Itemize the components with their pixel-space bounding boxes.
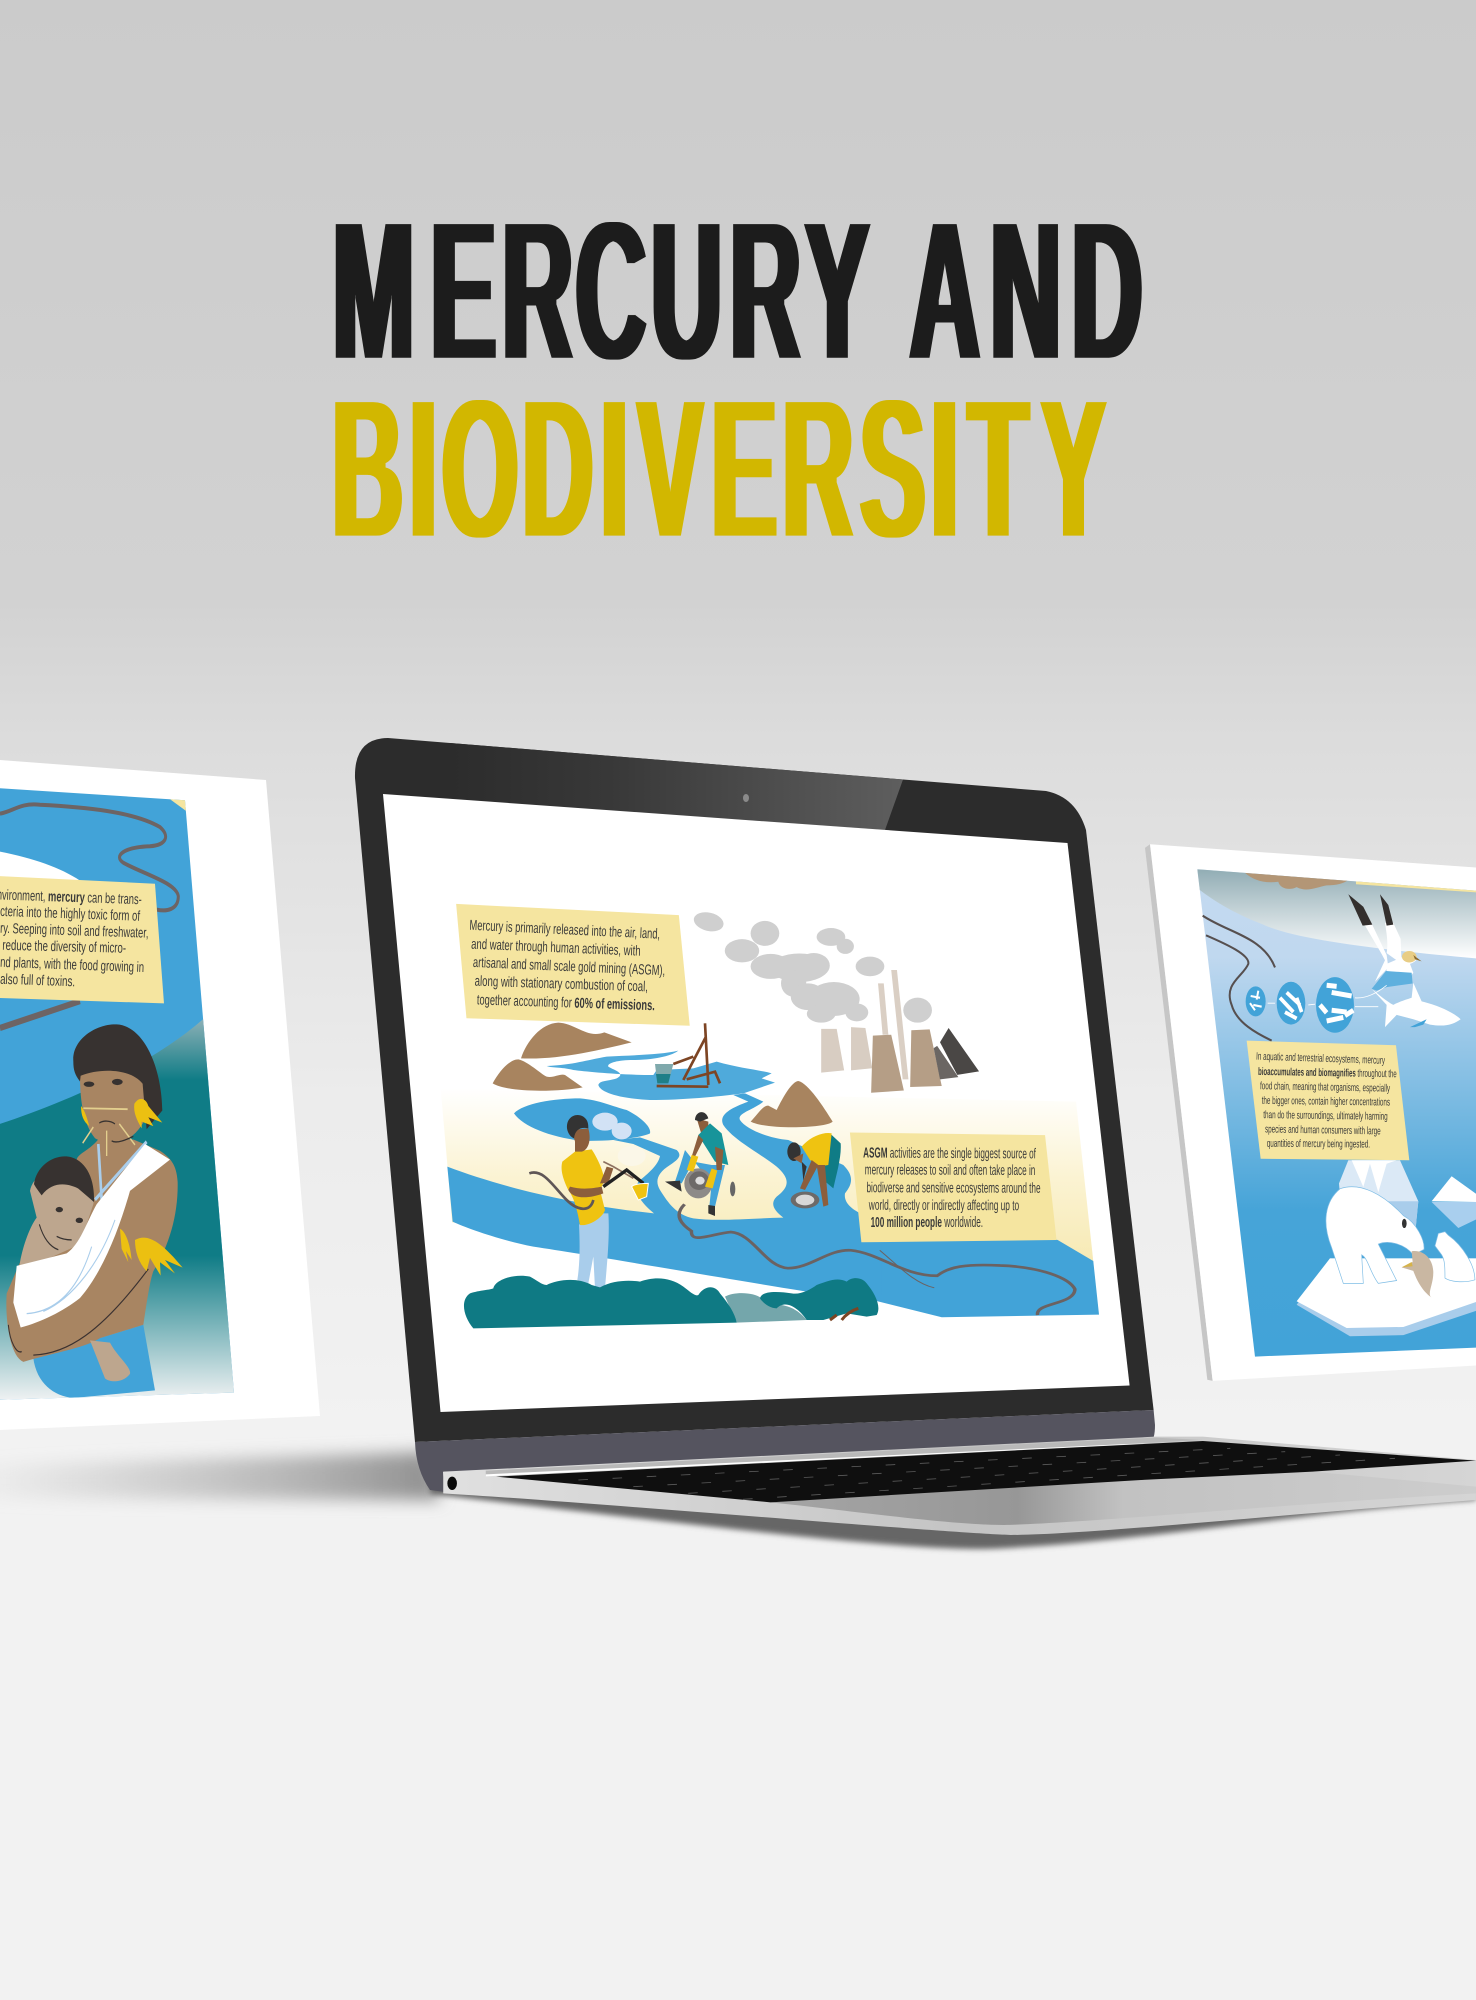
laptop base xyxy=(443,1437,1476,1535)
screen text: ASGM xyxy=(863,1146,1041,1231)
miner with hose xyxy=(529,1115,648,1288)
palm rest xyxy=(771,1472,1476,1525)
left text block: reduce the diversity of micro- xyxy=(2,938,126,957)
screen text: release sources: along with stationary combustion of coal, xyxy=(474,974,648,995)
text box: release sources xyxy=(456,904,690,1026)
right illustration background xyxy=(1197,869,1476,1357)
shark xyxy=(1372,983,1461,1027)
cooling towers and chimneys xyxy=(821,970,979,1093)
right text block: species and human consumers with large xyxy=(1265,1123,1381,1137)
hose and text box layer xyxy=(456,904,1075,1315)
left text block: also full of toxins. xyxy=(0,972,75,990)
dredge boat xyxy=(655,1023,720,1087)
text box: methylmercury xyxy=(0,876,164,1003)
text box: ASGM xyxy=(850,1132,1057,1242)
bird xyxy=(1348,894,1422,991)
title line: mercury and: MERCURY AND xyxy=(333,179,1142,403)
main river xyxy=(447,1093,882,1295)
audio port xyxy=(447,1477,457,1490)
screen text: ASGM: biodiverse and sensitive ecosystems around the xyxy=(866,1180,1041,1197)
mercury pipes xyxy=(1203,916,1275,1041)
mercury hose on river xyxy=(679,1204,1075,1315)
laptop screen illustration xyxy=(441,904,1099,1328)
title xyxy=(332,179,1142,581)
webcam xyxy=(743,794,749,802)
mining river scene xyxy=(447,1023,882,1328)
left pond xyxy=(514,1098,650,1141)
right text block: quantities of mercury being ingested. xyxy=(1267,1138,1370,1151)
screen text: release sources: together accounting for 60% of emissions. xyxy=(477,992,655,1014)
ice floe xyxy=(1297,1258,1476,1336)
screen text: ASGM: world, directly or indirectly affecting up to xyxy=(868,1198,1019,1214)
cream ground xyxy=(441,1088,1093,1314)
polar bear xyxy=(1326,1187,1475,1298)
screen xyxy=(383,794,1130,1412)
trees xyxy=(464,1276,878,1328)
screen text: release sources: artisanal and small scale gold mining (ASGM), xyxy=(473,955,666,979)
left infographic card xyxy=(0,760,320,1430)
left text block: ry. Seeping into soil and freshwater, xyxy=(0,921,149,942)
right text block: than do the surroundings, ultimately harming xyxy=(1263,1109,1388,1123)
clouds reflected xyxy=(592,1113,646,1166)
laptop shadow on floor xyxy=(0,1452,1476,1549)
iceberg xyxy=(1339,1160,1476,1235)
ground, smoke and power station layer xyxy=(441,909,1099,1317)
card paper xyxy=(0,760,320,1430)
title line: biodiversity: BIODIVERSITY xyxy=(332,357,1106,581)
left text block: nd plants, with the food growing in xyxy=(0,955,144,976)
laptop lid xyxy=(355,738,1154,1442)
right text block xyxy=(1256,1051,1397,1151)
hinge xyxy=(415,1410,1155,1492)
card edge and paper xyxy=(1145,844,1476,1381)
woman xyxy=(6,1024,178,1362)
left illustration: woman and child xyxy=(0,788,240,1401)
right text block: bioaccumulates and biomagnifies throughout the xyxy=(1258,1066,1397,1080)
screen text: release sources xyxy=(469,918,666,1014)
screen text: ASGM: mercury releases to soil and often take place in xyxy=(865,1162,1035,1179)
right text block: In aquatic and terrestrial ecosystems, mercury xyxy=(1256,1051,1386,1067)
miner with pan xyxy=(665,1112,735,1216)
right infographic card xyxy=(1145,844,1476,1381)
laptop xyxy=(355,738,1476,1535)
food chain circles xyxy=(1246,977,1387,1033)
left text block: nvironment, mercury can be trans- xyxy=(0,887,142,908)
mounds xyxy=(493,1023,833,1127)
screen text: ASGM: ASGM activities are the single biggest source of xyxy=(863,1146,1037,1162)
screen text: ASGM: 100 million people worldwide. xyxy=(871,1215,983,1231)
keyboard xyxy=(496,1441,1476,1502)
smoke xyxy=(690,909,932,1023)
upper pond xyxy=(547,1051,775,1100)
text box: bioaccumulation xyxy=(1247,1041,1409,1160)
arm feathers xyxy=(120,1229,183,1276)
downstream river xyxy=(874,1184,1099,1317)
body xyxy=(443,1437,1476,1535)
left text block: cteria into the highly toxic form of xyxy=(0,904,141,925)
screen text: release sources: Mercury is primarily released into the air, land, xyxy=(469,918,660,943)
left text block xyxy=(0,887,149,990)
child in sling xyxy=(8,1144,170,1381)
speaker strip xyxy=(486,1438,1203,1476)
miner bending xyxy=(787,1133,841,1208)
lid bezel highlight xyxy=(450,743,903,830)
screen text: release sources: and water through human activities, with xyxy=(471,937,641,960)
